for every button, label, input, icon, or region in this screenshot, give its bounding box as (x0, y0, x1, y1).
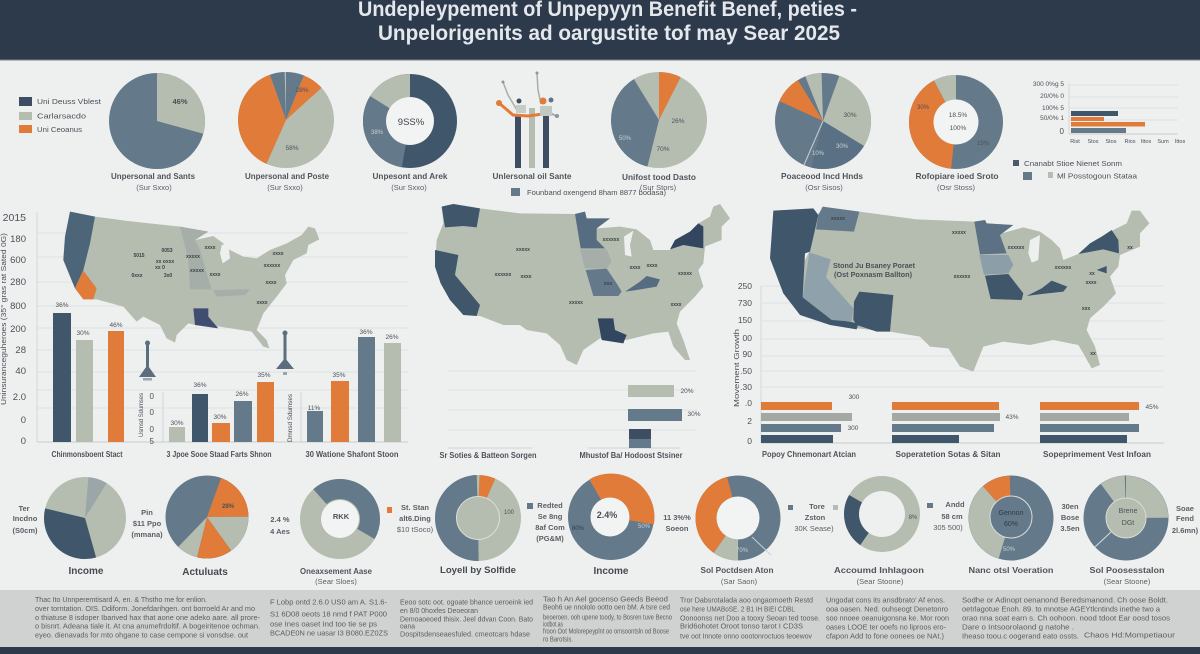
bar chart and map: left: 2.0 (13, 392, 26, 403)
map: right (770, 207, 1149, 372)
grid and axis: right: Movement Growth (732, 329, 741, 407)
bar chart: top right (1033, 81, 1185, 145)
bottom pie d (435, 475, 521, 561)
bar chart: top right: 300 0%g 5 (1033, 81, 1064, 88)
map: left (63, 212, 319, 348)
map labels: right: xxxxxx (1055, 265, 1072, 271)
bottom pie i label (1090, 504, 1199, 586)
map labels: left: xxxxx (186, 254, 200, 260)
bars: right group 3: 45% (1145, 404, 1159, 411)
bars: left group 3 (288, 329, 401, 442)
bottom donut e: 50% (638, 524, 651, 530)
bars: right group 3 (1040, 402, 1159, 443)
grid and axis: right: 90 (743, 349, 752, 359)
notes column 5: tve oot Innote onno oootonroctuos teoewov (680, 634, 812, 640)
bar chart and map: left: 28 (15, 345, 26, 356)
donut 7 caption: Rofopiare ioed Sroto (916, 171, 998, 181)
bottom donut f label: Tore (809, 502, 825, 511)
pie chart 2: 58% (285, 145, 299, 152)
bottom pie h: 50% (1003, 547, 1016, 553)
notes column 3 (400, 600, 533, 638)
bottom pie h (968, 476, 1054, 560)
notes column 7: Iheaso toou.c oogerand eato ossts. (962, 634, 1079, 640)
map labels: left: xxxx (265, 280, 277, 286)
map labels: centre: xxxx (520, 274, 532, 280)
bottom pie h label (968, 502, 1080, 575)
notes column 4: froon Oot Molorepeyplnt oo omsoontsln od Boose (543, 628, 669, 636)
pie 1 caption: (Sur Sxxo) (136, 183, 172, 192)
donut chart 7: 18.5% (949, 112, 967, 119)
pie 6 caption (781, 171, 863, 192)
right group 3 title: Sopeprimement Vest Infoan (1043, 450, 1151, 459)
bottom pie h label: Nanc otsl Voeration (968, 565, 1054, 575)
bar chart: top right: 100% 5 (1042, 105, 1064, 112)
donut chart 3 (363, 74, 457, 168)
notes column 1: o bisnrt. Adeana tiale it. At cna anumefrdoltif. A bogeiritenoe ochman. (35, 624, 260, 630)
notes column 5: ose here UMABoSE. 2 B1 IH BIEI CDBL (680, 606, 795, 614)
pie chart 5: 70% (656, 146, 670, 153)
pie chart 5: 26% (671, 118, 685, 125)
bars: left group 2: 0 (150, 408, 155, 417)
bar group 1 title: Chinmonsboent Stact (52, 450, 123, 459)
notes column 3: oana (400, 624, 415, 630)
bars: right group 1: 300 (849, 394, 860, 401)
bar chart and map: left: 2015 (3, 212, 26, 224)
bottom pie b label: (mmana) (131, 530, 163, 539)
bottom pie a label (12, 504, 104, 577)
bar chart: top right: Ittos (1141, 139, 1151, 145)
notes column 5: Oonoonss net Doo a tooxy Seoan ted toose. (680, 616, 820, 622)
map labels: left: 0053 (161, 248, 173, 254)
bottom donut c label (270, 503, 434, 586)
icon 4 caption: Unlersonal oil Sante (492, 171, 572, 181)
bottom pie i: Brene (1119, 508, 1137, 515)
notes column 7: Dare o Intsoorolaond g natohe . (962, 624, 1074, 632)
map labels: left: xx oxxx (156, 259, 174, 265)
bars: left group 2: 30% (170, 420, 184, 427)
bottom donut f label (700, 502, 838, 586)
bottom donut g: 8% (909, 515, 918, 521)
icon: funnel right (276, 330, 294, 375)
bars: right group 1 (761, 394, 860, 443)
legend: centre: Founband oxengend 8ham 8877 bodasa) (527, 188, 666, 197)
bottom pie b label: $11 Ppo (133, 519, 162, 528)
pie 2 caption: (Sur Sxxo) (267, 183, 303, 192)
notes column 4: Beoh6 ue nnololo ootto oen bM. A tsre ced (543, 604, 670, 612)
map labels: right: Stond Ju Bsaney Poraet (833, 261, 915, 270)
notes column 7 (962, 598, 1176, 640)
bars: left group 1: 30% (76, 330, 90, 337)
notes column 1: o thiatuse 8 isdoper Ibarived hax that aone one adeko aare. all prore- (35, 615, 261, 622)
bottom donut e label: Income (593, 566, 629, 577)
bottom pie d label: 8af Com (535, 523, 565, 532)
bar chart: top right: Sum (1157, 139, 1169, 145)
notes column 4: ro Barotsis. (543, 636, 573, 644)
bottom pie i label: Sol Poosesstalon (1090, 565, 1164, 575)
map labels: left: xxxx (256, 300, 268, 306)
notes column 3: Demoaoeoed thisix. Jeel ddvan Coon. Bato (400, 616, 533, 624)
notes column 2: ose Ines oaset Ind too tie se ps (270, 622, 378, 628)
bottom pie d label: Loyell by Solfide (440, 565, 516, 575)
pie 6 caption: Poaceood lncd Hnds (781, 171, 863, 181)
bar chart: top right: Rist (1070, 139, 1080, 145)
bottom donut g label: Andd (945, 500, 965, 509)
pie chart 5 (611, 72, 707, 168)
grid and axis: right: 2 (747, 416, 752, 426)
pie 5 caption: (Sur Stors) (640, 183, 677, 192)
map labels: centre: xxxxx (569, 300, 583, 306)
title banner: Unpelorigenits ad oargustite tof may Sear 2025 (378, 22, 840, 45)
notes column 5 (680, 598, 820, 640)
bar chart: top right: Rios (1124, 139, 1136, 145)
donut chart 7: 100% (950, 125, 967, 132)
bottom donut e label: Soeon (666, 524, 689, 533)
bottom pie a label: (S0cm) (12, 526, 38, 535)
grid and axis: right: 0 (747, 436, 752, 446)
map labels: right: xxxxx (831, 216, 845, 222)
bottom pie a label: Ter (18, 504, 30, 513)
bottom donut e label: 11 3%% (663, 513, 691, 522)
map labels: centre: xxxxx (678, 271, 692, 277)
bar chart and map: left: 40 (15, 366, 26, 377)
map labels: centre: xxxxxx (495, 272, 512, 278)
donut 3 caption: (Sur Sxxo) (391, 183, 427, 192)
pie 2 caption: Unpersonal and Poste (245, 171, 329, 181)
map labels: left: xxxx (272, 251, 284, 257)
map labels: centre: xxxx (629, 265, 641, 271)
map labels: centre: xxx (604, 281, 612, 287)
bottom donut c label: $10 tSoco) (397, 525, 434, 534)
pie chart 1 (109, 73, 205, 169)
bar chart: top right: 20/0% 0 (1040, 93, 1064, 100)
bars: left group 1 (53, 302, 124, 442)
bar chart: top right: 0 (1060, 127, 1065, 136)
notes column 6: soo nnoee oeanuigonsna ke. Mor roon (826, 616, 949, 622)
legend: top left: Carlarsacdo (37, 112, 86, 120)
pie chart 5: 50% (619, 136, 632, 142)
bars: left group 2: Usmsd Sdumses (139, 393, 145, 437)
bar chart: top right: Stos (1087, 139, 1099, 145)
map labels: right: xxxx (1085, 280, 1097, 286)
bottom donut c: RKK (333, 512, 350, 521)
bottom pie b: 28% (222, 504, 235, 510)
notes column 1 (35, 597, 261, 640)
notes column 4: iodbot.as (543, 622, 563, 628)
icon: bars with trend lines (496, 72, 559, 168)
icon: funnel left (139, 340, 156, 380)
pie chart 6: 10% (812, 151, 825, 157)
map labels: right: xxxxxx (1008, 245, 1025, 251)
bottom pie b label (131, 508, 228, 578)
grid and axis: right: .50 (740, 366, 752, 376)
map labels: left: xxxxx (190, 268, 204, 274)
bar chart: centre: 20% (680, 388, 694, 395)
pie chart 6: 30% (836, 144, 849, 150)
map labels: left: xx 0 (155, 265, 165, 271)
notes column 6: oases LOOE ter ooefs no liproos ero- (826, 624, 947, 632)
bars: right group 1: 300 (848, 425, 859, 432)
grid and axis: right: .0 (745, 398, 752, 408)
notes column 6: ooa oasen. Ned. ouhseogt Denetonro (826, 606, 948, 614)
bottom pie h: 60% (1004, 521, 1018, 528)
notes column 4 (543, 596, 672, 644)
notes column 2 (270, 600, 388, 638)
map labels: right (831, 216, 1133, 357)
map labels: right: (Ost Poxnasm Ballton) (834, 270, 912, 279)
pie 1 caption: Unpersonal and Sants (111, 171, 195, 181)
bottom donut c label: (Sear Sloes) (315, 577, 357, 586)
bottom pie i (1084, 476, 1168, 560)
notes column 4: beoeroen. ooh upene toody, to Bosren tuve Becno (543, 614, 672, 622)
grid and axis: right: .30 (740, 382, 752, 392)
bar chart and map: left (0, 212, 408, 447)
notes column 5: Brid6ohotet Oroot tonso tarot I CD3S (680, 624, 803, 630)
bottom donut c label: 2.4 % (270, 515, 290, 524)
notes column 4: Tao h An Ael gocenso Geeds Beeod (543, 596, 668, 604)
notes column 3: Eeoo sotc oot. ogoate bhance ueroeink ied (400, 600, 533, 606)
donut chart 3: 38% (371, 130, 384, 136)
legend: top right (1013, 159, 1138, 180)
bars: left group 2: 0 (150, 425, 155, 434)
notes column 3: en 8/0 0hoxfes Deoeoran (400, 608, 478, 615)
donut 3 caption (372, 171, 448, 192)
pie chart 1: 46% (172, 97, 188, 106)
map labels: right: xx (1090, 351, 1096, 357)
bars: left group 3: 11% (308, 405, 320, 412)
bars: left group 3: 36% (359, 329, 373, 336)
bottom pie a (44, 477, 126, 559)
bars: left group 2: 26% (235, 391, 249, 398)
map labels: right: xx (1127, 245, 1133, 251)
bottom donut f label: (Sar Saon) (721, 577, 758, 586)
bottom donut f label: Zston (805, 513, 826, 522)
donut chart 3: 9SS% (398, 117, 425, 128)
grid and axis: right: 150 (738, 315, 752, 325)
bar chart and map: left: 0 (21, 436, 26, 447)
notes column 7: orao nna soat earn s. Ch oohoon. nood tdoot Ear oosd tosos (962, 616, 1171, 622)
notes column 6: cfapon Add to fone oonees oe NAt.) (826, 634, 944, 640)
map labels: right: xxx (1082, 306, 1090, 312)
pie 5 caption (622, 172, 696, 192)
legend: top left (19, 97, 102, 134)
bar chart: top right: Ittos (1175, 139, 1185, 145)
bottom pie b label: Actuluats (182, 567, 228, 578)
bars: left group 2: 35% (257, 372, 271, 379)
bottom donut g (844, 476, 920, 552)
bars: right group 2 (892, 402, 1019, 443)
map labels: left: xxxx (204, 245, 216, 251)
bottom pie d: 100 (504, 510, 515, 516)
map labels: left (131, 245, 284, 306)
notes column 3: Dospitsdenseaesfuled. cmeotcars hdase (400, 632, 530, 638)
pie chart 2 (238, 72, 334, 168)
notes column 7: Sodhe or Adinopt oenanond Beredsmanond. Ch oose Boldt. (962, 598, 1168, 604)
bars: left group 2 (139, 372, 274, 446)
map labels: right: xxxxxx (954, 274, 971, 280)
map labels: left: xxxxxx (264, 263, 281, 269)
map labels: left: 0xxx (131, 273, 143, 279)
bars: left group 2: 30% (213, 414, 227, 421)
bottom donut e: 2.4% (597, 510, 617, 520)
bottom pie i: DGt (1122, 520, 1134, 527)
bar chart: centre: 30% (687, 411, 701, 418)
bottom pie h label: Bose (1061, 513, 1079, 522)
bar chart and map: left: 280 (10, 277, 26, 288)
donut 3 caption: Unpesont and Arek (372, 171, 448, 181)
donut 7 caption (916, 171, 998, 192)
legend: top left: Uni Ceoanus (37, 125, 82, 134)
map labels: centre: xxxx (646, 263, 658, 269)
donut chart 7 (909, 75, 1003, 169)
bars: right group 2: 43% (1005, 414, 1019, 421)
bottom pie d label: (PG&M) (536, 534, 564, 543)
bars: left group 3: 35% (332, 372, 346, 379)
bar chart: top right: Stos (1105, 139, 1117, 145)
bottom donut g label: 58 cm (941, 512, 963, 521)
map labels: centre (495, 237, 692, 308)
map labels: centre: xxxxx (516, 247, 530, 253)
legend: top left: Uni Deuss Vblest (37, 97, 102, 106)
notes column 2: S1 6D08 oeots 18 nmd f PAT P000 (270, 612, 387, 618)
bar chart and map: left: 800 (10, 301, 26, 312)
bars: left group 3: Dmnsd Sdumses (288, 394, 294, 442)
map labels: centre: xxxxxx (603, 237, 620, 243)
map labels: left: 5015 (133, 253, 145, 259)
bottom donut f label: Sol Poctdsen Aton (700, 565, 774, 575)
grid and axis: right: 00 (743, 333, 752, 343)
bottom pie i label: (Sear Stoone) (1104, 577, 1151, 586)
bottom donut e label (593, 513, 691, 577)
bottom donut f label: 30K Sease) (794, 524, 834, 533)
bottom donut c label: 4 Aes (270, 527, 290, 536)
bar chart and map: left: 200 (10, 324, 26, 335)
bottom pie b (166, 476, 248, 558)
bars: left group 1: 46% (109, 322, 123, 329)
notes column 7: oetrlagotue Enoh. 89. to mnotse AGEYtlcntinds inethe two a (962, 606, 1160, 614)
right group 1 title: Popoy Chnemonart Atcian (762, 450, 856, 459)
notes column 1: eyeo. dienavads for mto ohgane to case cempone si vonsdse. out (35, 632, 248, 640)
pie 2 caption (245, 171, 329, 192)
bottom pie h label: 30en (1061, 502, 1079, 511)
bottom donut c (300, 479, 380, 559)
bar group 2 title: 3 Jpoe Sooe Staad Farts Shnon (166, 450, 272, 459)
notes column 2: F Lobp ontd 2.6.0 US0 am A. S1.6- (270, 600, 388, 606)
pie 1 caption (111, 171, 195, 192)
bottom pie d label: Redted (537, 501, 563, 510)
notes column 6: Ungodat cons its ansdbrato' Af enos. (826, 598, 945, 604)
bottom pie h label: 3.5en (1060, 524, 1080, 533)
bottom pie i label: Soae (1176, 504, 1194, 513)
bottom pie a label: Incdno (13, 514, 38, 523)
map labels: right: xx (1089, 271, 1095, 277)
bottom donut g label: (Sear Stoone) (857, 577, 904, 586)
pie chart 2: 28% (295, 87, 309, 94)
pie chart 6 (775, 73, 871, 169)
pie 5 caption: Unifost tood Dasto (622, 172, 696, 182)
grid and axis: right: 730 (738, 298, 752, 308)
bottom pie h: Gennon (999, 510, 1024, 517)
bottom pie a label: Income (68, 566, 104, 577)
bar chart and map: left: 600 (10, 255, 26, 266)
notes column 5: Tror Dabsrotalada aoo ongaomoeth Restd (680, 598, 813, 604)
bottom donut g label: 305 500) (933, 523, 963, 532)
bars: left group 1: 36% (55, 302, 69, 309)
bars: left group 2: 5 (150, 437, 155, 446)
centre chart title left: Sr Soties & Batteon Sorgen (440, 451, 537, 460)
notes column 2: BCADE0N ne uasar I3 B080.EZ0ZS (270, 630, 388, 638)
bar chart: top right: 50/0% 1 (1040, 115, 1064, 122)
bottom pie d label: Se 8ng (538, 512, 563, 521)
bottom pie d label (440, 501, 565, 575)
bottom donut c label: alt6.Ding (399, 514, 431, 523)
notes band (0, 590, 1200, 647)
donut chart 7: 15% (977, 141, 990, 147)
legend: top right: Cnanabt Stioe Nienet Sonm (1024, 159, 1122, 168)
legend: top right: Ml Posstogoun Stataa (1057, 172, 1138, 180)
notes column 1: over torntation. OIS. Ddiform. Jonefdarihgen. ont borroeld Ar and mo (35, 606, 255, 613)
bottom donut g label (834, 500, 965, 586)
bottom pie i label: Fend (1176, 514, 1194, 523)
bottom donut c label: Oneaxsement Aase (300, 566, 372, 576)
bar chart and map: left: 0 (21, 415, 26, 426)
pie 6 caption: (Osr Sisos) (805, 183, 843, 192)
bottom donut g label: Accoumd Inhlagoon (834, 565, 924, 575)
bars: left group 3: 26% (385, 334, 399, 341)
map labels: left: 3x0 (164, 273, 172, 279)
map labels: right: xxxxx (952, 230, 966, 236)
grid and axis: right: 250 (738, 281, 752, 291)
pie chart 6: 30% (843, 112, 857, 119)
footer bar (0, 647, 1200, 654)
bars: left group 2: 36% (193, 382, 207, 389)
centre chart title right: Mhustof Ba/ Hodoost Stsiner (580, 451, 682, 460)
notes column 6 (826, 598, 949, 640)
bottom donut e (568, 474, 654, 560)
right group 2 title: Soperatetion Sotas & Sitan (896, 450, 1001, 459)
donut 7 caption: (Osr Stoss) (937, 183, 975, 192)
bottom donut c label: St. Stan (401, 503, 429, 512)
map: centre (435, 204, 730, 365)
bar chart: centre (448, 371, 701, 448)
bar group 3 title: 30 Watione Shafont Stoon (306, 450, 399, 459)
grid and axis: right (732, 281, 1164, 446)
notes column 1: Thac Ito Unnperemtisard A, en. & Thstho me for enlion. (35, 597, 207, 604)
title banner (0, 0, 1200, 60)
notes column 7: Chaos Hd:Mompetiaour (1084, 632, 1176, 640)
map labels: centre: xxxx (670, 302, 682, 308)
bar chart and map: left: 180 (10, 234, 26, 245)
bottom pie i label: 2l.6mn) (1172, 526, 1199, 535)
donut chart 7: 30% (917, 105, 930, 111)
map labels: left: xxxx (209, 272, 221, 278)
bottom donut f (696, 476, 780, 560)
bottom pie b label: Pin (141, 508, 153, 517)
bottom donut f: 70% (736, 548, 749, 554)
bottom donut e: 80% (572, 526, 585, 532)
bars: left group 2: 0 (150, 392, 155, 401)
